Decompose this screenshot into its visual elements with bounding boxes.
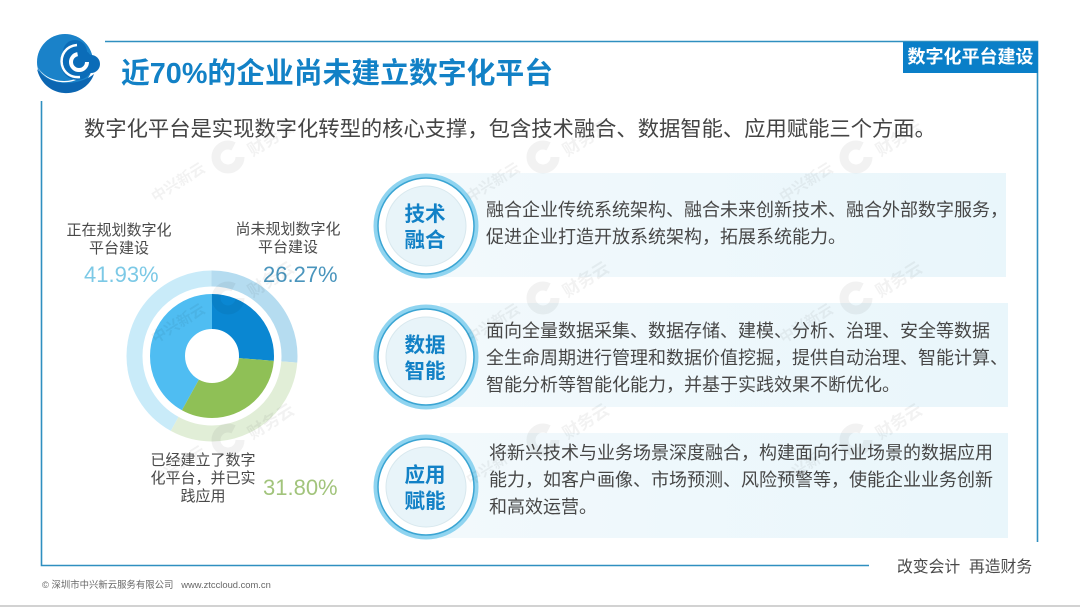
heading [404, 334, 446, 383]
heading [404, 464, 446, 513]
panel: data [374, 303, 1008, 410]
donut chart [126, 270, 298, 442]
panel: application [374, 433, 1008, 540]
heading: 应用 [404, 464, 446, 487]
slogan: 改变会计 再造财务 [897, 559, 1032, 576]
subtitle text: 数字化平台是实现数字化转型的核心支撑，包含技术融合、数据智能、应用赋能三个方面。 [84, 117, 936, 141]
badge [903, 42, 1038, 73]
watermarks: 中兴新云 [464, 301, 523, 347]
watermarks: 财务云 [559, 400, 613, 443]
watermarks: 中兴新云 [149, 443, 208, 489]
label: not planned [235, 221, 340, 256]
watermarks: 中兴新云 [464, 443, 523, 489]
panel background [440, 433, 1008, 538]
label: built [150, 452, 256, 505]
icon: cloud logo [37, 34, 100, 94]
watermarks: 中兴新云 [149, 301, 208, 347]
text [486, 200, 1008, 247]
label: not planned: 尚未规划数字化 [235, 221, 340, 238]
value: planning: 41.93% [84, 262, 159, 287]
label: planning [66, 222, 172, 257]
title: 近70%的企业尚未建立数字化平台 [121, 58, 553, 90]
watermarks: 财务云 [872, 258, 926, 301]
text: 面向全量数据采集、数据存储、建模、分析、治理、安全等数据 [486, 321, 990, 341]
panel background [440, 303, 1008, 407]
watermarks: 财务云 [244, 117, 298, 160]
text: 智能分析等智能化能力，并基于实践效果不断优化。 [486, 375, 900, 395]
panel background [440, 173, 1006, 277]
label: built: 已经建立了数字 [150, 452, 256, 469]
text: 将新兴技术与业务场景深度融合，构建面向行业场景的数据应用 [489, 443, 993, 463]
icon: circle badge [374, 174, 478, 278]
text [489, 443, 993, 517]
heading [404, 203, 446, 252]
watermarks: 财务云 [244, 258, 298, 301]
text: 融合企业传统系统架构、融合未来创新技术、融合外部数字服务， [486, 200, 1008, 220]
icon: circle badge [374, 304, 478, 410]
watermarks: 中兴新云 [777, 301, 836, 347]
value: built: 31.80% [263, 475, 338, 500]
text: 促进企业打造开放系统架构，拓展系统能力。 [486, 227, 846, 247]
label: planning: 平台建设 [89, 240, 149, 257]
label: planning: 正在规划数字化 [66, 222, 172, 239]
label: built: 践应用 [180, 488, 226, 505]
watermarks: 财务云 [244, 400, 298, 443]
watermarks: 中兴新云 [149, 160, 208, 206]
value: not planned: 26.27% [263, 262, 338, 287]
text: 能力，如客户画像、市场预测、风险预警等，使能企业业务创新 [489, 470, 993, 490]
watermarks: 财务云 [872, 117, 926, 160]
heading: 赋能 [404, 490, 446, 513]
heading: 数据 [404, 334, 446, 357]
icon: circle badge [374, 434, 478, 540]
heading: 智能 [404, 360, 446, 383]
badge: 数字化平台建设 [908, 47, 1034, 67]
label: built: 化平台，并已实 [150, 470, 256, 487]
text [486, 321, 1008, 395]
watermarks: 中兴新云 [777, 160, 836, 206]
watermarks: 中兴新云 [777, 443, 836, 489]
label: not planned: 平台建设 [258, 239, 318, 256]
watermarks: 中兴新云 [464, 160, 523, 206]
watermarks: 财务云 [559, 117, 613, 160]
text: 和高效运营。 [489, 497, 597, 517]
heading: 技术 [404, 203, 446, 226]
heading: 融合 [404, 229, 446, 252]
watermarks: 财务云 [559, 258, 613, 301]
panel: technology [374, 173, 1008, 278]
copyright: © 深圳市中兴新云服务有限公司 www.ztccloud.com.cn [42, 579, 271, 590]
text: 全生命周期进行管理和数据价值挖掘，提供自动治理、智能计算、 [486, 348, 1008, 368]
watermarks: 财务云 [872, 400, 926, 443]
